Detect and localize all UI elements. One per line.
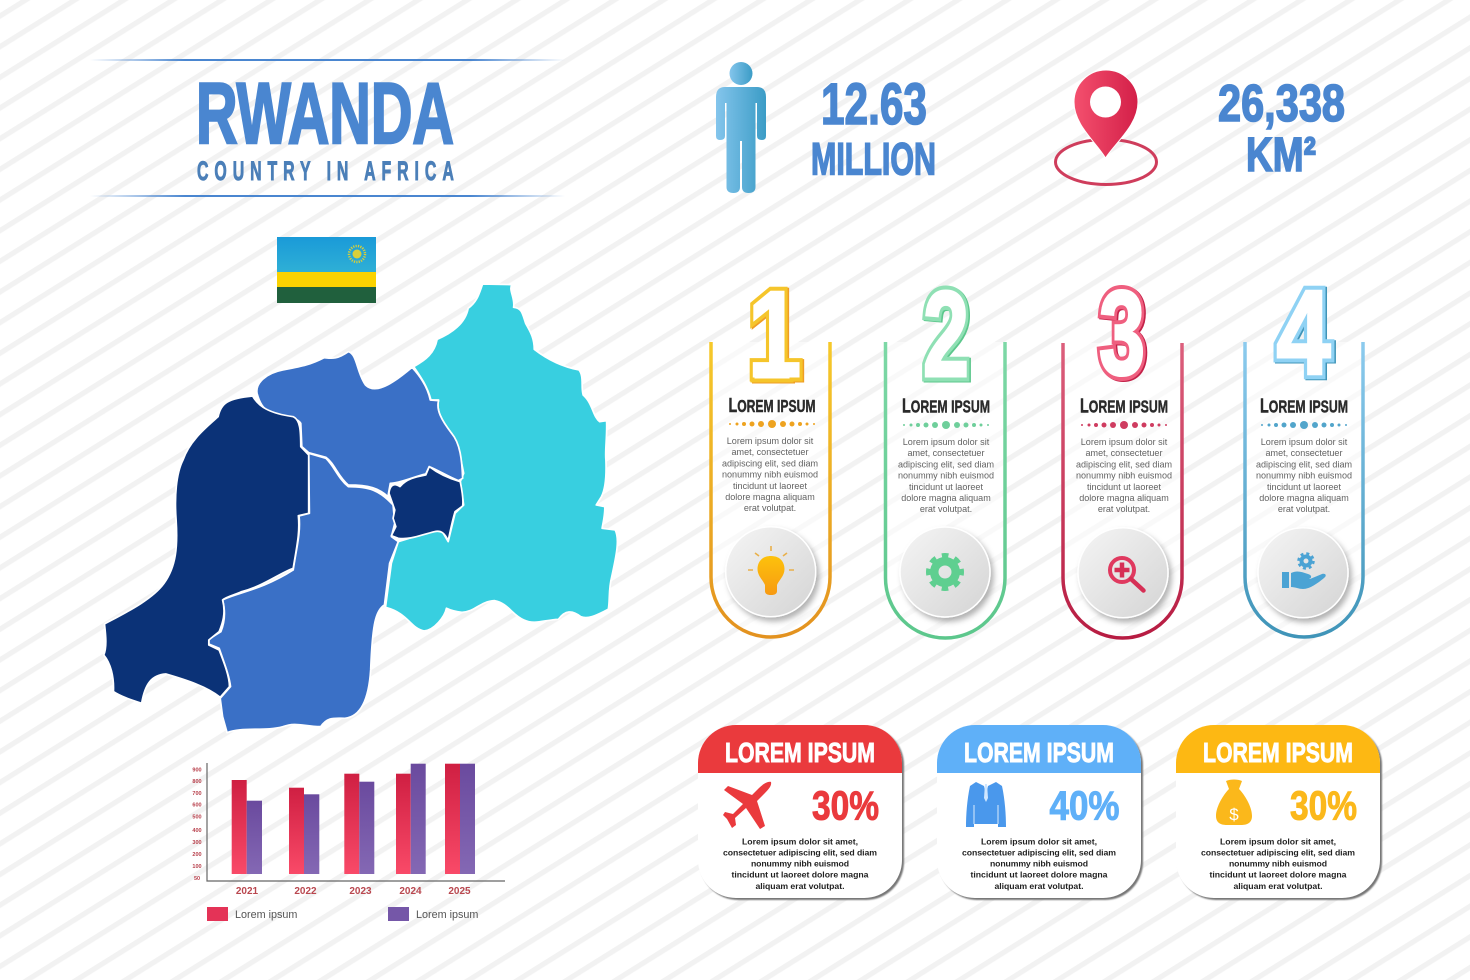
icon: hand with gear	[1282, 554, 1326, 589]
panel: step 1	[711, 266, 830, 637]
button	[1258, 528, 1348, 618]
map region: Kigali	[389, 467, 463, 541]
body text: dolore magna aliquam	[1079, 493, 1169, 503]
heading: LOREM IPSUM	[1080, 394, 1168, 418]
body text: erat volutpat.	[1278, 504, 1330, 514]
body text: Lorem ipsum dolor sit amet,	[742, 836, 858, 846]
body text: adipiscing elit, sed diam	[1256, 459, 1352, 469]
panel: step 4	[1245, 266, 1363, 637]
icon: magnifier	[1110, 558, 1144, 590]
button	[900, 527, 990, 617]
number 4: 4	[1276, 266, 1331, 400]
icon: Rwanda flag	[277, 237, 376, 303]
heading: LOREM IPSUM	[1260, 394, 1348, 418]
chart axis labels: 800	[192, 779, 202, 785]
percentage: 30%	[812, 782, 879, 828]
chart year labels: 2021	[236, 886, 259, 897]
body text	[723, 836, 877, 891]
bar chart	[192, 763, 505, 921]
chart axis labels: 900	[192, 768, 202, 774]
icon: person	[716, 62, 766, 193]
population stat	[716, 62, 936, 193]
card title: LOREM IPSUM	[1203, 737, 1353, 768]
area unit: KM²	[1246, 129, 1316, 182]
dots	[1261, 421, 1347, 429]
chart year labels: 2025	[448, 886, 471, 897]
body text: erat volutpat.	[744, 503, 796, 513]
body text: aliquam erat volutpat.	[1234, 881, 1322, 891]
body text: consectetuer adipiscing elit, sed diam	[723, 848, 877, 858]
heading: LOREM IPSUM	[728, 394, 816, 417]
chart axis labels: 50	[194, 876, 200, 882]
body text	[898, 437, 994, 514]
body text: Lorem ipsum dolor sit amet,	[1220, 836, 1336, 846]
panel: step 2	[886, 266, 1005, 638]
chart axis labels	[192, 768, 202, 882]
body text: tincidunt ut laoreet dolore magna	[1210, 870, 1347, 880]
card header	[1176, 725, 1380, 773]
panel: step 3	[1063, 266, 1182, 638]
dots	[729, 420, 815, 428]
card title: LOREM IPSUM	[725, 737, 875, 768]
body text: nonummy nibh euismod	[722, 470, 818, 480]
body text: aliquam erat volutpat.	[756, 881, 844, 891]
title: Rwanda: RWANDA	[196, 66, 454, 162]
button	[726, 527, 816, 617]
body text: amet, consectetuer	[1266, 448, 1342, 458]
dots	[1081, 421, 1167, 429]
body text	[1076, 437, 1172, 514]
subtitle: COUNTRY IN AFRICA	[197, 156, 454, 186]
chart year labels: 2022	[294, 886, 317, 897]
body text: tincidunt ut laoreet	[1267, 482, 1341, 492]
body text: Lorem ipsum dolor sit amet,	[981, 836, 1097, 846]
number 2: 2	[923, 266, 969, 402]
body text: nonummy nibh euismod	[1076, 471, 1172, 481]
body text: amet, consectetuer	[1086, 448, 1162, 458]
panel: stat card yellow	[1176, 725, 1382, 900]
card header	[937, 725, 1141, 773]
chart axis labels: 500	[192, 814, 202, 820]
number 1: 1	[748, 266, 801, 402]
body text: nonummy nibh euismod	[751, 859, 849, 869]
body text: dolore magna aliquam	[901, 493, 991, 503]
chart bars: series one	[232, 764, 460, 874]
card header	[698, 725, 902, 773]
body text: Lorem ipsum dolor sit	[903, 437, 990, 447]
body text	[1201, 836, 1355, 891]
icon: money bag	[1216, 780, 1252, 825]
body text: consectetuer adipiscing elit, sed diam	[962, 848, 1116, 858]
card title: LOREM IPSUM	[964, 737, 1114, 768]
number 2	[923, 266, 970, 403]
body text: nonummy nibh euismod	[898, 471, 994, 481]
icon: airplane	[723, 782, 771, 829]
body text	[962, 836, 1116, 891]
area stat	[1056, 70, 1345, 184]
number 3: 3	[1099, 266, 1145, 400]
body text: tincidunt ut laoreet	[1087, 482, 1161, 492]
percentage: 40%	[1050, 782, 1120, 828]
heading: LOREM IPSUM	[902, 394, 990, 418]
chart axis labels: 100	[192, 864, 202, 870]
number 1: 1	[750, 267, 802, 403]
body text: nonummy nibh euismod	[1229, 859, 1327, 869]
population value: 12.63	[821, 72, 927, 137]
number 2: 2	[924, 267, 970, 403]
chart axis labels: 400	[192, 828, 202, 834]
icon: location pin	[1056, 70, 1156, 184]
body text: Lorem ipsum dolor sit	[1261, 437, 1348, 447]
body text: dolore magna aliquam	[725, 492, 815, 502]
body text: Lorem ipsum dolor sit	[727, 436, 814, 446]
title block	[90, 59, 565, 197]
icon: light bulb	[748, 546, 794, 595]
body text	[722, 436, 818, 513]
chart legend	[207, 907, 478, 921]
body text: nonummy nibh euismod	[1256, 471, 1352, 481]
number 2: 2	[923, 266, 969, 402]
number 3: 3	[1099, 266, 1145, 400]
body text: adipiscing elit, sed diam	[1076, 459, 1172, 469]
body text: dolore magna aliquam	[1259, 493, 1349, 503]
body text: tincidunt ut laoreet	[909, 482, 983, 492]
percentage: 30%	[1290, 782, 1357, 828]
body text: amet, consectetuer	[908, 448, 984, 458]
chart axis labels: 300	[192, 840, 202, 846]
panel: stat card blue	[937, 725, 1143, 900]
chart legend: Lorem ipsum	[416, 909, 478, 921]
body text: erat volutpat.	[920, 504, 972, 514]
body text: Lorem ipsum dolor sit	[1081, 437, 1168, 447]
icon: suit jacket	[966, 782, 1006, 827]
body text	[1256, 437, 1352, 514]
map region: west	[104, 396, 309, 703]
number 1: 1	[748, 266, 801, 402]
number 4: 4	[1278, 267, 1332, 401]
number 3: 3	[1100, 267, 1146, 401]
body text: tincidunt ut laoreet dolore magna	[732, 870, 869, 880]
chart bars: series two	[247, 764, 475, 874]
number 4: 4	[1276, 266, 1331, 400]
chart legend: Lorem ipsum	[235, 909, 297, 921]
body text: aliquam erat volutpat.	[994, 881, 1084, 891]
chart axis labels: 700	[192, 791, 202, 797]
chart year labels: 2023	[349, 886, 372, 897]
chart year labels: 2024	[399, 886, 422, 897]
body text: tincidunt ut laoreet	[733, 481, 807, 491]
body text: consectetuer adipiscing elit, sed diam	[1201, 848, 1355, 858]
body text: nonummy nibh euismod	[990, 859, 1088, 869]
body text: tincidunt ut laoreet dolore magna	[970, 870, 1108, 880]
icon: gear	[928, 556, 962, 588]
body text: amet, consectetuer	[732, 447, 808, 457]
panel: stat card red	[698, 725, 904, 900]
body text: adipiscing elit, sed diam	[898, 459, 994, 469]
map of Rwanda	[104, 284, 617, 733]
dots	[903, 421, 989, 429]
chart axis labels: 200	[192, 852, 202, 858]
body text: erat volutpat.	[1098, 504, 1150, 514]
map region: north	[257, 352, 463, 497]
chart year labels	[236, 886, 471, 897]
icon: money bag: $	[1229, 805, 1239, 824]
body text: adipiscing elit, sed diam	[722, 458, 818, 468]
population unit: MILLION	[811, 134, 936, 184]
button	[1078, 528, 1168, 618]
area value: 26,338	[1218, 75, 1345, 133]
map region: east	[385, 284, 617, 631]
map region: south	[209, 453, 398, 733]
chart axis labels: 600	[192, 802, 202, 808]
